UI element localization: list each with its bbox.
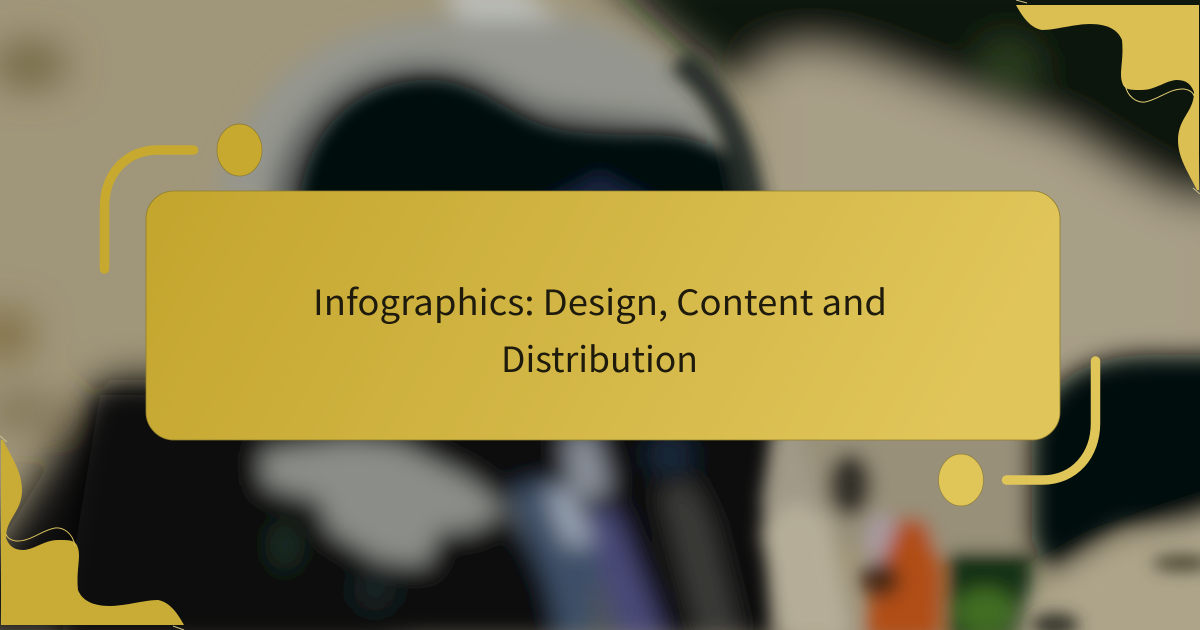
decorative arc: bottom right xyxy=(1006,361,1096,480)
decorative circle: top left xyxy=(217,124,262,176)
corner shape: bottom left xyxy=(0,436,184,630)
title: Infographics: Design, Content and xyxy=(313,275,887,326)
title panel xyxy=(146,191,1060,440)
decorative arc: top left xyxy=(104,150,194,269)
corner shape: top right xyxy=(1016,0,1200,194)
title xyxy=(313,275,887,383)
title: Distribution xyxy=(501,332,698,383)
decorative circle: bottom right xyxy=(938,454,984,506)
